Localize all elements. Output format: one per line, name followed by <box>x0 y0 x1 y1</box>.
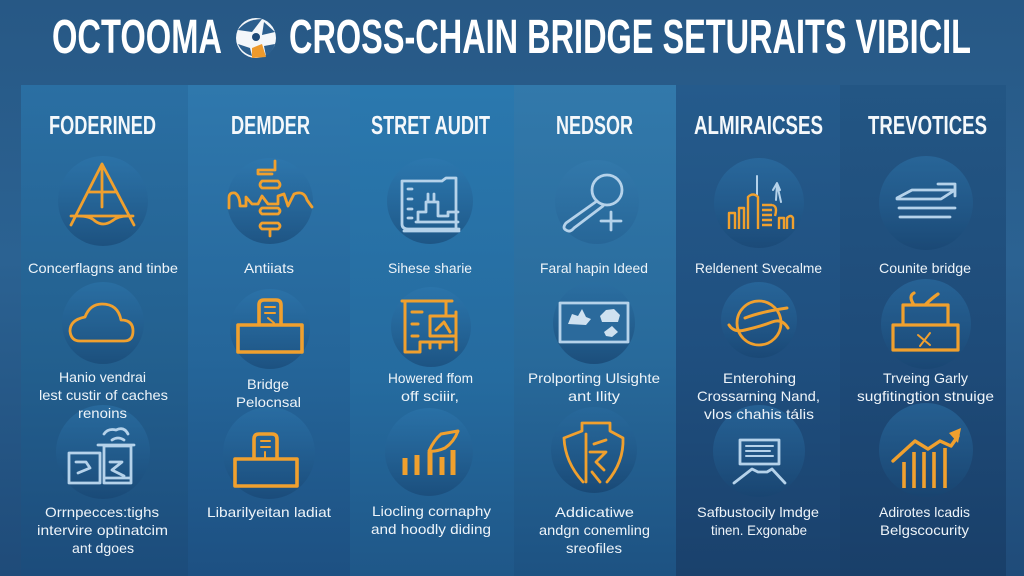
icon: rising chart <box>879 403 973 497</box>
icon: cloud <box>62 282 144 364</box>
label: Trveing Garly <box>883 370 968 386</box>
label: Reldenent Svecalme <box>695 260 822 276</box>
icon: bridge tower <box>58 156 148 246</box>
heading: column 3: STRET AUDIT <box>371 110 490 140</box>
icon: audit laptop <box>387 158 473 244</box>
icon: stacked boxes <box>56 405 150 499</box>
label <box>39 369 168 421</box>
label <box>697 504 819 538</box>
title: OCTOOMA <box>52 11 222 64</box>
label: Addicatiwe <box>555 504 634 520</box>
label: Howered ffom <box>388 370 473 386</box>
icon: layers with arrow <box>879 156 973 250</box>
label <box>879 504 970 538</box>
icon: skyline <box>714 158 804 248</box>
label: Sihese sharie <box>388 260 472 276</box>
heading: column 1: FODERINED <box>49 110 156 140</box>
label <box>528 370 660 404</box>
label: Belgscocurity <box>880 522 969 538</box>
label: tinen. Exgonabe <box>711 522 807 538</box>
label: Safbustocily lmdge <box>697 504 819 520</box>
label: vlos chahis tális <box>704 406 814 422</box>
panel: column 6 <box>840 85 1006 576</box>
label: Pelocnsal <box>236 394 301 410</box>
icon: circuit squiggle <box>227 158 313 244</box>
icon: magnifier plus <box>555 160 639 244</box>
heading: column 5: ALMIRAICSES <box>694 110 823 140</box>
label: Orrnpecces:tighs <box>45 504 159 520</box>
label: Concerflagns and tinbe <box>28 260 178 276</box>
panel: column 1 <box>21 85 188 576</box>
label: Faral hapin Ideed <box>540 260 648 276</box>
label: Liocling cornaphy <box>372 503 491 519</box>
icon: dashboard frame <box>553 282 635 364</box>
label <box>697 370 820 422</box>
label <box>857 370 994 404</box>
icon: globe swoosh <box>721 282 797 358</box>
label <box>388 370 473 404</box>
label: sreofiles <box>566 540 622 556</box>
label: intervire optinatcim <box>37 522 168 538</box>
label: Hanio vendrai <box>59 369 146 385</box>
label <box>539 504 650 556</box>
label: and hoodly diding <box>371 521 491 537</box>
icon: globe logo <box>236 18 276 58</box>
icon: bridge block <box>230 289 310 369</box>
label: ant dgoes <box>72 540 134 556</box>
label: Bridge <box>247 376 289 392</box>
icon: gift box <box>881 279 971 369</box>
label: Libarilyeitan ladiat <box>207 504 331 520</box>
label <box>236 376 301 410</box>
label: Enterohing <box>723 370 796 386</box>
label: andgn conemling <box>539 522 650 538</box>
label: renoins <box>78 405 127 421</box>
label: Crossarning Nand, <box>697 388 820 404</box>
label <box>371 503 491 537</box>
heading: column 4: NEDSOR <box>556 110 633 140</box>
label: ant Ility <box>568 388 620 404</box>
label: lest custir of caches <box>39 387 168 403</box>
panel: column 4 <box>514 85 676 576</box>
label: off sciiir, <box>401 388 459 404</box>
panel: column 2 <box>188 85 350 576</box>
icon: monitor on stand <box>713 405 805 497</box>
label: sugfitingtion stnuige <box>857 388 994 404</box>
label: Prolporting Ulsighte <box>528 370 660 386</box>
panel: column 3 <box>350 85 514 576</box>
label: Antiiats <box>244 260 294 276</box>
icon: shield <box>551 407 637 493</box>
label: Counite bridge <box>879 260 971 276</box>
label: Adirotes lcadis <box>879 504 970 520</box>
icon: bridge block <box>223 407 315 499</box>
icon: document chart <box>391 287 471 367</box>
heading: column 2: DEMDER <box>231 110 310 140</box>
icon: bars and pen <box>385 408 473 496</box>
label <box>37 504 168 556</box>
panel: column 5 <box>676 85 840 576</box>
